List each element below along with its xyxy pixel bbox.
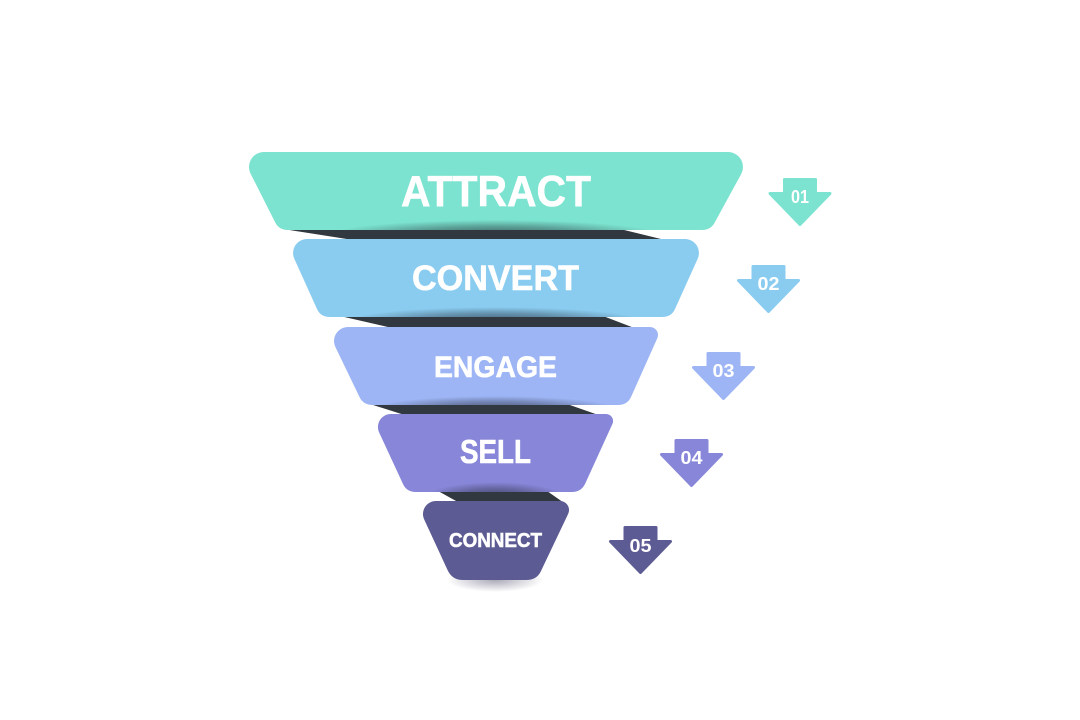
connector: dark fold between engage and sell bbox=[370, 404, 597, 414]
arrow 03 bbox=[694, 354, 754, 398]
funnel infographic bbox=[249, 152, 832, 591]
funnel band 4: sell bbox=[378, 414, 614, 492]
arrow 01 bbox=[770, 180, 830, 224]
arrow 04 bbox=[662, 440, 722, 486]
arrow 02: 02 bbox=[758, 274, 780, 294]
funnel band 1: attract bbox=[249, 152, 743, 230]
label: attract: ATTRACT bbox=[401, 167, 591, 216]
label: convert: CONVERT bbox=[412, 259, 579, 298]
connector: dark fold between convert and engage bbox=[340, 316, 633, 328]
connector: dark fold between attract and convert bbox=[283, 229, 663, 240]
funnel band 2: convert bbox=[293, 239, 699, 317]
label: connect: CONNECT bbox=[449, 530, 542, 552]
funnel band 3: engage bbox=[334, 327, 658, 405]
arrow 05 bbox=[610, 528, 670, 572]
shadow under connect band bbox=[447, 568, 543, 592]
arrow 02 bbox=[738, 266, 798, 312]
funnel band 5: connect bbox=[423, 501, 569, 580]
arrow 04: 04 bbox=[680, 448, 702, 468]
arrow 03: 03 bbox=[712, 361, 734, 381]
label: engage: ENGAGE bbox=[434, 351, 557, 384]
arrow 05: 05 bbox=[630, 536, 652, 556]
arrow 01: 01 bbox=[791, 187, 809, 207]
label: sell: SELL bbox=[460, 433, 531, 470]
connector: dark fold between sell and connect bbox=[438, 491, 562, 502]
